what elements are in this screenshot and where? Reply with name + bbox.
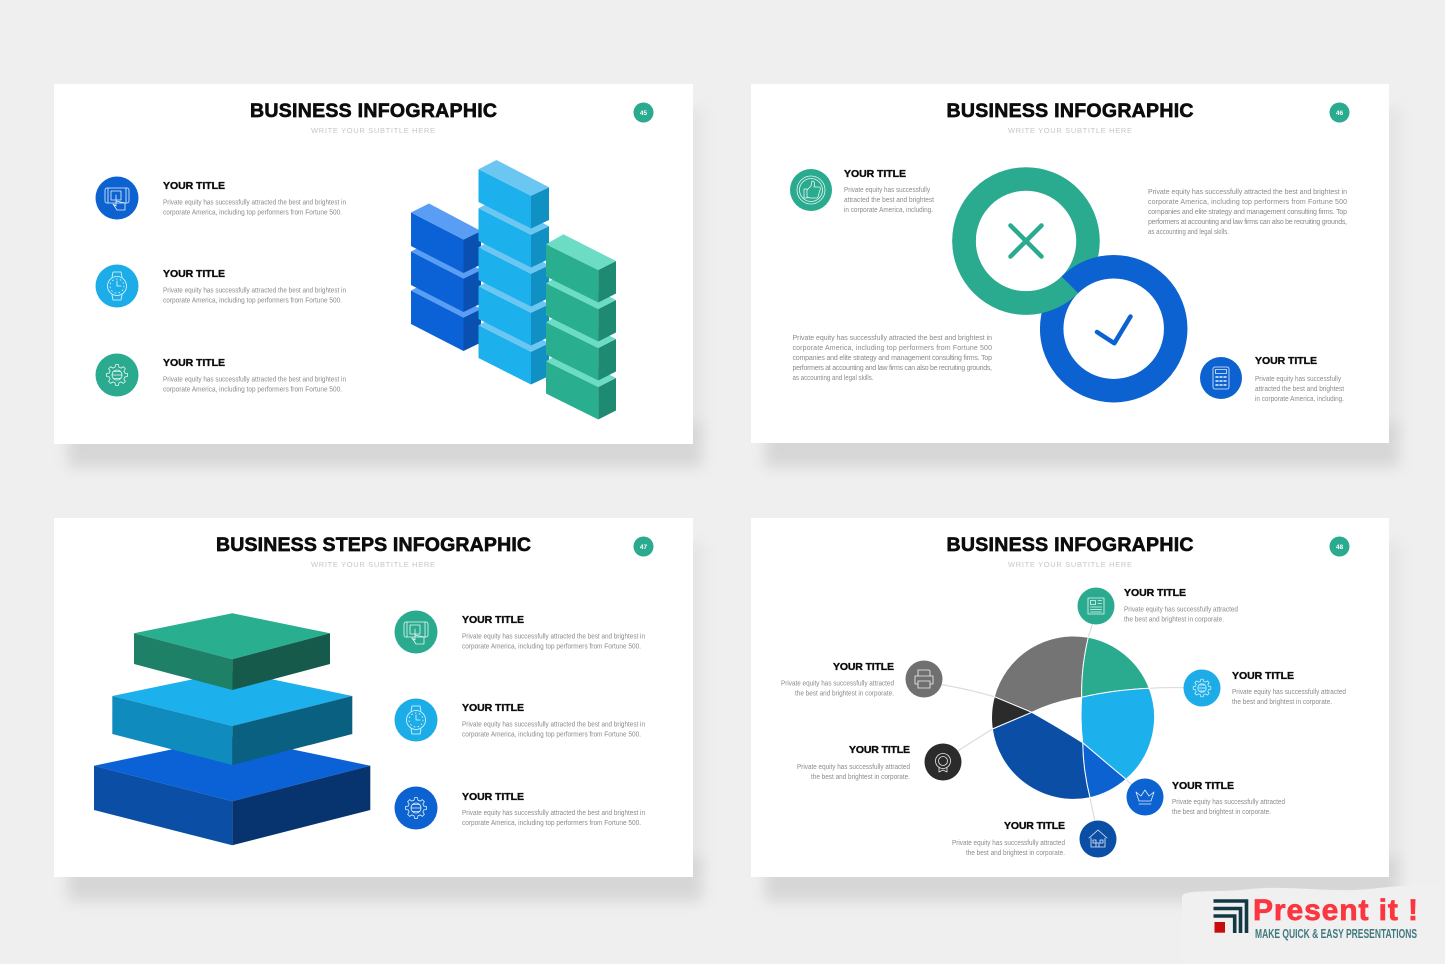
item: printer: YOUR TITLE: [833, 661, 894, 673]
title: BUSINESS STEPS INFOGRAPHIC: [216, 534, 531, 556]
panel: slide 45 isometric bars: [54, 84, 693, 444]
paragraph lower left: as accounting and legal skills.: [792, 375, 874, 382]
item 3: [394, 786, 645, 830]
paragraph lower left: [792, 335, 992, 382]
paragraph top right: Private equity has successfully attracted the best and brightest in: [1148, 189, 1347, 196]
paragraph top right: performers at accounting and law firms can also be recruiting grounds,: [1148, 219, 1347, 226]
title: BUSINESS INFOGRAPHIC: [946, 534, 1194, 556]
page badge 48: 48: [1336, 544, 1343, 551]
item 3: YOUR TITLE: [462, 791, 524, 803]
item: thumbs up: in corporate America, including.: [844, 207, 933, 214]
item 2: corporate America, including top performers from Fortune 500.: [462, 732, 641, 738]
logo mark: [1214, 901, 1246, 933]
item 1: corporate America, including top performers from Fortune 500.: [462, 644, 641, 650]
item: medal: YOUR TITLE: [849, 744, 910, 756]
item: calculator: YOUR TITLE: [1255, 355, 1317, 367]
item: house: [952, 820, 1116, 858]
subtitle: WRITE YOUR SUBTITLE HERE: [311, 560, 435, 569]
icon: check: [1097, 316, 1130, 343]
item: calculator: [1200, 355, 1344, 403]
item 1: YOUR TITLE: [462, 614, 524, 626]
item: right gear: the best and brightest in corporate.: [1232, 699, 1332, 706]
paragraph lower left: corporate America, including top performers from Fortune 500: [792, 345, 992, 352]
page badge 45: 45: [640, 110, 647, 117]
item 1: corporate America, including top performers from Fortune 500.: [163, 210, 342, 216]
item: medal: the best and brightest in corporate.: [811, 774, 910, 781]
title: BUSINESS INFOGRAPHIC: [946, 100, 1194, 122]
item 1: Private equity has successfully attracted the best and brightest in: [462, 634, 645, 640]
item: thumbs up: YOUR TITLE: [844, 168, 906, 180]
item 1: YOUR TITLE: [163, 180, 225, 192]
item: printer: Private equity has successfully attracted: [781, 680, 894, 688]
item: printer: the best and brightest in corporate.: [795, 690, 894, 698]
item: right gear: YOUR TITLE: [1232, 670, 1294, 682]
item: right gear: [1184, 670, 1346, 706]
linked rings chart: [964, 179, 1176, 391]
subtitle: WRITE YOUR SUBTITLE HERE: [1008, 126, 1132, 135]
item: crown: Private equity has successfully attracted: [1172, 799, 1285, 806]
item: house: YOUR TITLE: [1004, 820, 1065, 832]
title: BUSINESS INFOGRAPHIC: [250, 100, 497, 122]
item: thumbs up: Private equity has successfully: [844, 187, 930, 194]
item 3: Private equity has successfully attracted the best and brightest in: [163, 376, 346, 384]
item: calculator: in corporate America, including.: [1255, 396, 1344, 403]
item: top document: YOUR TITLE: [1124, 587, 1186, 599]
item: crown: YOUR TITLE: [1172, 780, 1234, 792]
item: house: Private equity has successfully attracted: [952, 840, 1065, 847]
panel: slide 46 linked rings: [751, 84, 1389, 443]
paragraph lower left: performers at accounting and law firms can also be recruiting grounds,: [792, 365, 992, 372]
watermark logo: [1182, 885, 1445, 964]
item: thumbs up: [790, 168, 934, 214]
paragraph top right: corporate America, including top performers from Fortune 500: [1148, 199, 1347, 206]
layer: middle light blue: [112, 671, 352, 765]
isometric bars: light blue column: [478, 160, 549, 384]
item 2: [96, 264, 346, 308]
paragraph top right: companies and elite strategy and management consulting firms. Top: [1148, 209, 1347, 216]
paragraph top right: as accounting and legal skills.: [1148, 229, 1229, 236]
paragraph lower left: companies and elite strategy and management consulting firms. Top: [792, 355, 992, 362]
item 2: YOUR TITLE: [462, 702, 524, 714]
isometric bars: blue column: [411, 204, 481, 351]
item 2: Private equity has successfully attracted the best and brightest in: [163, 288, 346, 294]
item 1: Private equity has successfully attracted the best and brightest in: [163, 200, 346, 206]
page badge 46: [1330, 102, 1350, 122]
item 3: corporate America, including top performers from Fortune 500.: [462, 820, 641, 827]
page badge 46: 46: [1336, 110, 1343, 117]
paragraph top right: [1148, 189, 1347, 236]
item: medal: Private equity has successfully attracted: [797, 764, 910, 771]
item: top document: [1078, 587, 1238, 624]
item: calculator: Private equity has successfully: [1255, 376, 1341, 383]
item 2: YOUR TITLE: [163, 268, 225, 280]
page badge 48: [1330, 536, 1350, 556]
page badge 47: 47: [640, 544, 647, 551]
item: right gear: Private equity has successfully attracted: [1232, 689, 1346, 696]
layer: bottom blue: [94, 737, 370, 845]
item: house: the best and brightest in corporate.: [966, 850, 1065, 857]
item 3: [96, 354, 346, 396]
segmented pie chart: [992, 636, 1155, 799]
item 2: corporate America, including top performers from Fortune 500.: [163, 298, 342, 304]
isometric bars: green column: [546, 234, 616, 420]
item: medal: [797, 744, 962, 781]
item: thumbs up: attracted the best and brightest: [844, 197, 934, 204]
item 3: corporate America, including top performers from Fortune 500.: [163, 386, 342, 394]
item 3: Private equity has successfully attracted the best and brightest in: [462, 810, 645, 817]
brand name: Present it !: [1253, 894, 1418, 927]
item: top document: the best and brightest in corporate.: [1124, 616, 1224, 624]
item 1: [394, 610, 645, 654]
item: calculator: attracted the best and brightest: [1255, 386, 1344, 393]
page badge 45: [634, 102, 654, 122]
panel: slide 48 segmented pie: [751, 518, 1389, 877]
subtitle: WRITE YOUR SUBTITLE HERE: [1008, 560, 1132, 569]
layer: top green: [134, 613, 330, 690]
item 3: YOUR TITLE: [163, 357, 225, 369]
paragraph lower left: Private equity has successfully attracted the best and brightest in: [792, 335, 992, 342]
item 2: [394, 698, 645, 742]
page badge 47: [634, 536, 654, 556]
subtitle: WRITE YOUR SUBTITLE HERE: [311, 126, 435, 135]
panel: slide 47 stacked steps: [54, 518, 693, 877]
icon: cross: [1010, 226, 1042, 256]
stacked layers chart: [94, 613, 370, 845]
item: printer: [781, 660, 942, 698]
item 2: Private equity has successfully attracted the best and brightest in: [462, 722, 645, 728]
item: crown: [1126, 778, 1285, 816]
item: crown: the best and brightest in corporate.: [1172, 809, 1271, 816]
leader lines: [938, 622, 1190, 822]
item: top document: Private equity has successfully attracted: [1124, 606, 1238, 614]
item 1: [96, 176, 346, 220]
